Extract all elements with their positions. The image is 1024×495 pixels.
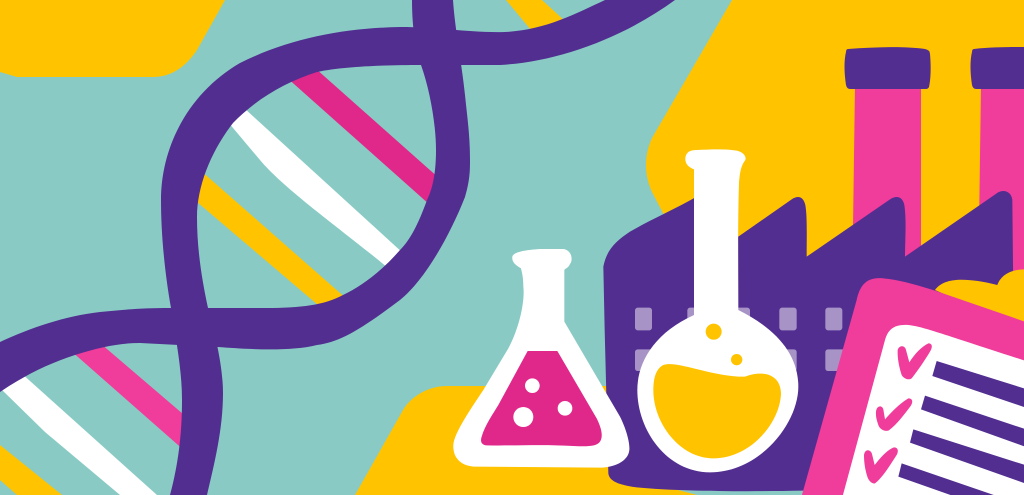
dna helix — [0, 0, 675, 495]
clipboard paper — [843, 325, 1024, 495]
check 2 — [876, 398, 912, 431]
rung: white — [228, 108, 404, 268]
rung: lower yellow — [0, 445, 62, 495]
rung: yellow — [190, 170, 348, 305]
bubble: left — [513, 407, 533, 427]
check 3 — [864, 447, 898, 483]
factory building — [603, 191, 1013, 491]
rung: lower pink — [70, 343, 190, 452]
conical flask liquid — [481, 351, 602, 446]
chimney cap: right — [970, 47, 1024, 89]
checklist lines — [898, 361, 1024, 495]
clipboard board — [802, 278, 1024, 495]
strand: second backbone — [0, 0, 470, 392]
checkmarks — [864, 343, 932, 483]
round flask — [637, 149, 798, 472]
yellow shape: bottom — [355, 386, 697, 495]
round flask glass — [637, 149, 798, 472]
conical flask glass — [453, 249, 629, 468]
chimneys — [844, 47, 1024, 300]
rung: dark pink — [285, 68, 440, 205]
check 1 — [898, 343, 932, 379]
round flask liquid — [653, 364, 781, 458]
factory — [603, 191, 1013, 491]
chimney body: left — [852, 85, 921, 300]
clipboard clip — [935, 269, 1024, 330]
factory windows — [635, 308, 845, 371]
bubble: large — [706, 324, 722, 340]
rung: lower white — [0, 372, 157, 495]
conical flask — [453, 249, 629, 468]
bubble: top — [525, 378, 540, 393]
yellow shape: top left — [0, 0, 225, 77]
yellow shape: right — [646, 0, 1024, 300]
chimney body: right — [978, 85, 1024, 300]
strand: first backbone — [161, 0, 675, 495]
clipboard — [802, 269, 1024, 495]
bubble: small — [731, 354, 742, 365]
rung: top yellow — [506, 0, 566, 36]
chimney cap: left — [844, 47, 931, 89]
bubble: right — [558, 401, 572, 416]
